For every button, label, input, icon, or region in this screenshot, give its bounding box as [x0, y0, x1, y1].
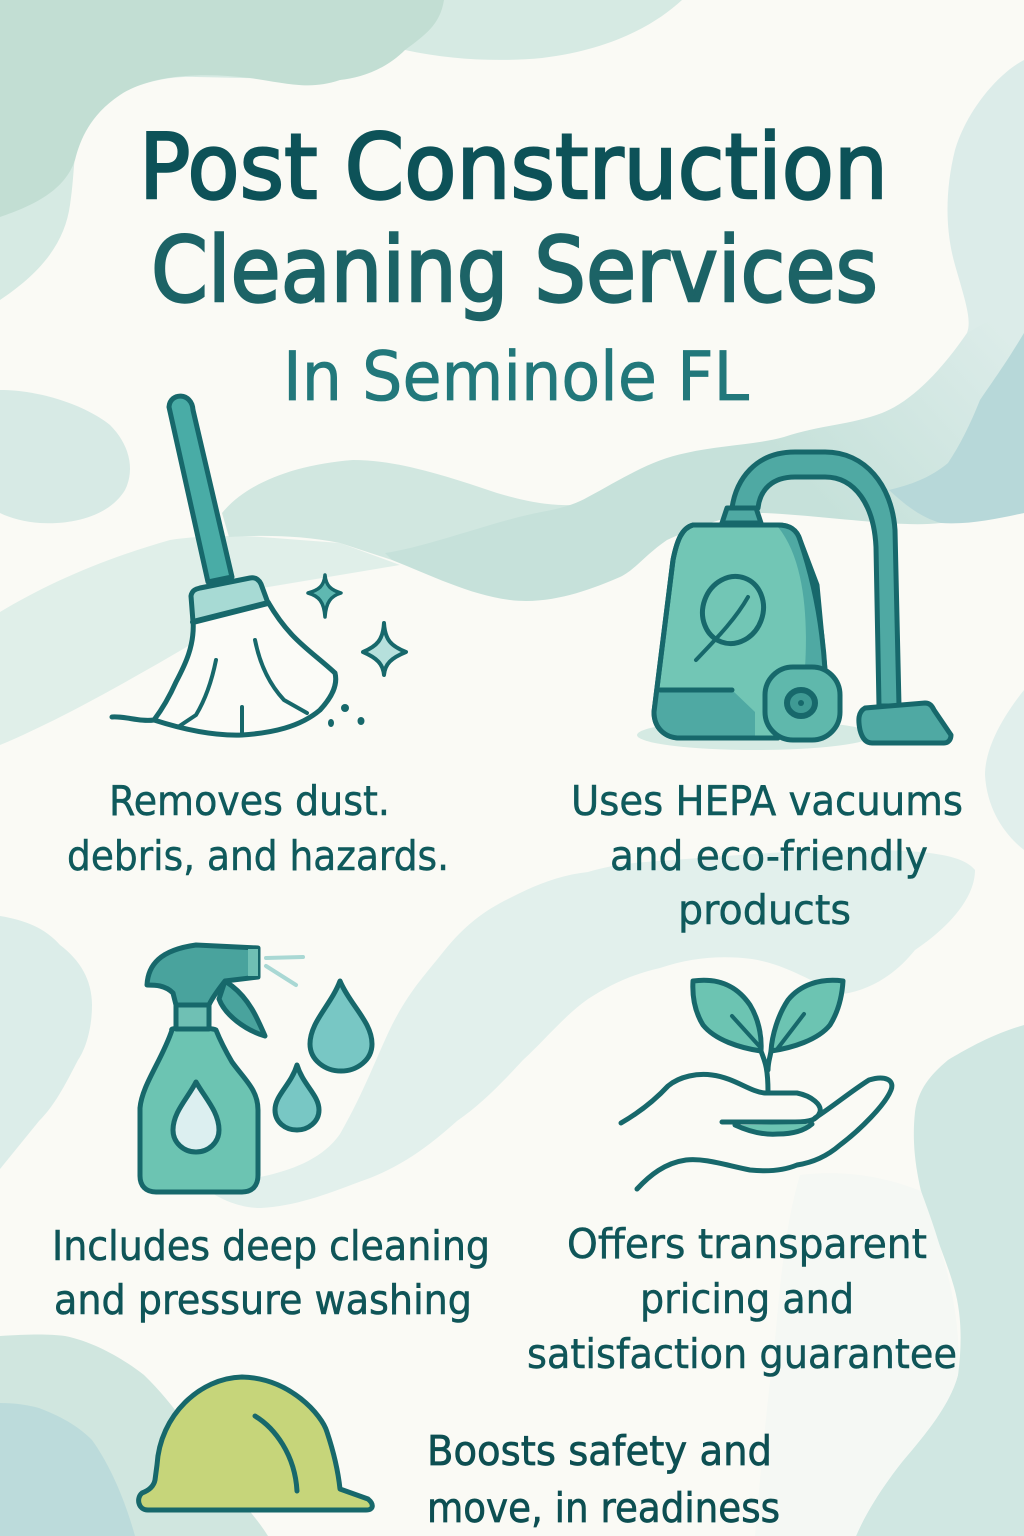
bristles	[154, 602, 336, 735]
text: HEPA vacuums: Uses HEPA vacuums	[571, 777, 963, 825]
subtitle: In Seminole FL	[283, 338, 749, 417]
text: HEPA vacuums: products	[678, 886, 851, 934]
neck	[722, 508, 761, 523]
ferrule	[191, 578, 268, 622]
hose	[732, 452, 899, 706]
text: safety readiness	[427, 1427, 780, 1532]
icon: broom	[112, 396, 406, 735]
text: HEPA vacuums: and eco-friendly	[610, 832, 928, 880]
bottle body	[140, 1028, 258, 1192]
leaf emblem	[693, 568, 773, 660]
title	[139, 115, 888, 323]
trigger	[219, 981, 265, 1036]
text: deep cleaning	[52, 1222, 490, 1324]
text: removes dust	[67, 777, 449, 880]
text: deep cleaning: Includes deep cleaning	[52, 1222, 490, 1270]
text: removes dust: debris, and hazards.	[67, 832, 449, 880]
text: safety readiness: move, in readiness	[427, 1484, 780, 1532]
text: transparent pricing	[527, 1220, 957, 1378]
text: safety readiness: Boosts safety and	[427, 1427, 772, 1475]
left leaf	[693, 980, 761, 1051]
dust	[328, 704, 364, 727]
text: transparent pricing: pricing and	[640, 1275, 854, 1323]
palm	[735, 1124, 812, 1134]
bottle neck	[176, 1005, 209, 1029]
title: Post Construction	[139, 115, 888, 220]
text: HEPA vacuums	[571, 777, 963, 934]
sparkle small	[308, 575, 341, 617]
handle	[169, 396, 232, 582]
text: deep cleaning: and pressure washing	[54, 1276, 472, 1324]
text: transparent pricing: Offers transparent	[567, 1220, 927, 1268]
icon: vacuum	[637, 452, 951, 750]
text: transparent pricing: satisfaction guarantee	[527, 1330, 957, 1378]
sparkle large	[363, 623, 406, 675]
spray head	[147, 945, 258, 1005]
right leaf	[771, 980, 843, 1051]
wheel	[765, 667, 840, 740]
icon: hard hat	[139, 1377, 372, 1510]
stem	[761, 1051, 771, 1092]
large drop	[310, 981, 372, 1071]
icon: plant in hand	[621, 980, 892, 1189]
body	[654, 525, 825, 738]
thumb and wrist	[637, 1078, 892, 1189]
droplet label	[173, 1082, 219, 1152]
small drop	[275, 1065, 319, 1130]
title: Cleaning Services	[151, 218, 878, 323]
floor nozzle	[859, 703, 951, 743]
spray mist	[266, 957, 303, 985]
shadow	[637, 720, 873, 750]
icon: spray bottle	[140, 945, 372, 1192]
hand	[621, 1074, 820, 1123]
text: removes dust: Removes dust.	[109, 777, 390, 825]
